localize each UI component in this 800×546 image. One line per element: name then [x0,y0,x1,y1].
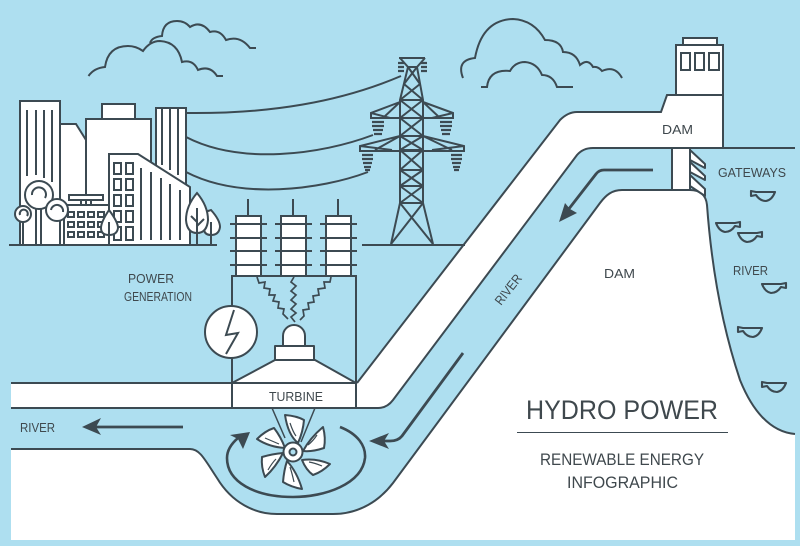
panel: lower land and dam body [11,190,795,540]
ground line: city [9,244,217,246]
icon: generator [205,306,257,358]
label: gateways: GATEWAYS [718,165,786,180]
subtitle: INFOGRAPHIC [567,474,678,492]
icon: transmission tower [360,58,465,245]
panel: upper dam wall band [11,95,795,408]
title: HYDRO POWER [526,395,718,425]
label: dam body: DAM [604,266,635,281]
title divider [517,432,728,434]
power wires [186,76,401,189]
icon: propeller [257,408,330,489]
subtitle: RENEWABLE ENERGY [540,451,704,469]
cloud: left [88,21,256,76]
icon: trees [15,181,220,245]
turbine house frame [232,276,356,383]
cloud: right [461,19,622,87]
label: dam top: DAM [662,122,693,137]
icon: turbine house roof [232,325,356,408]
panel: left river bank band [11,383,232,407]
label: power generation [124,271,192,304]
icon: tower insulators [362,63,462,170]
subtitle [540,451,704,492]
arrow: turbine swirl [227,427,365,497]
arrow: water from gateway [559,170,653,222]
fish group [716,191,786,392]
label: turbine: TURBINE [269,389,323,404]
zigzag electric links [257,277,331,322]
arrow: river flow left [82,418,183,435]
label: river diagonal: RIVER [492,271,525,308]
label: power generation: GENERATION [124,289,192,304]
label: river left: RIVER [20,420,55,435]
icon: three transformers [230,199,357,276]
label: river right: RIVER [733,263,768,278]
icon: gateways [672,148,705,196]
label: power generation: POWER [128,271,174,286]
arrow: water down to turbine [369,353,463,449]
icon: control tower [676,38,723,95]
icon: city buildings [20,101,190,245]
